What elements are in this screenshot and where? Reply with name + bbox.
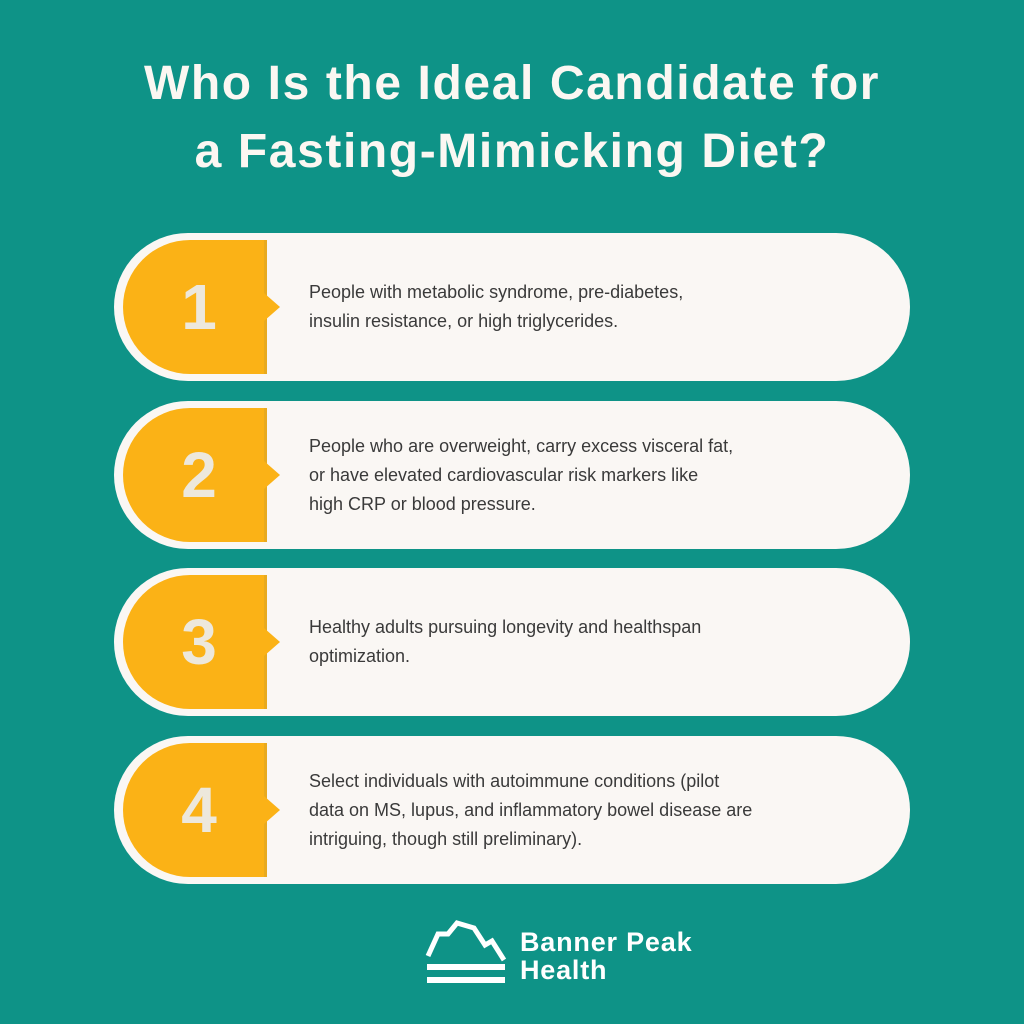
brand name — [520, 927, 692, 985]
card 2 — [114, 401, 910, 549]
text 3: Healthy adults pursuing longevity and healthspan — [309, 617, 701, 637]
text 4 — [309, 770, 752, 849]
text 2: or have elevated cardiovascular risk markers like — [309, 464, 698, 484]
card 3 — [114, 568, 910, 716]
arrow 1 — [264, 293, 280, 321]
text 1 — [309, 282, 683, 331]
title: a Fasting-Mimicking Diet? — [195, 125, 829, 178]
title: Who Is the Ideal Candidate for — [144, 57, 880, 110]
logo — [426, 920, 692, 985]
text 3: optimization. — [309, 646, 410, 666]
text 4: intriguing, though still preliminary). — [309, 828, 582, 848]
title — [144, 57, 880, 178]
badge 4: 4 — [181, 774, 217, 846]
text 2 — [309, 436, 733, 514]
badge 1: 1 — [181, 271, 217, 343]
brand name: Health — [520, 955, 607, 985]
text 1: insulin resistance, or high triglycerides. — [309, 311, 618, 331]
badge 2: 2 — [181, 439, 217, 511]
brand name: Banner Peak — [520, 927, 692, 957]
text 4: data on MS, lupus, and inflammatory bowel disease are — [309, 800, 752, 820]
badge 3: 3 — [181, 606, 217, 678]
text 3 — [309, 617, 701, 666]
text 2: high CRP or blood pressure. — [309, 494, 536, 514]
arrow 4 — [264, 796, 280, 824]
text 4: Select individuals with autoimmune conditions (pilot — [309, 770, 719, 790]
text 2: People who are overweight, carry excess visceral fat, — [309, 436, 733, 456]
badge 1 — [123, 240, 267, 374]
badge 3 — [123, 575, 267, 709]
badge 2 — [123, 408, 267, 542]
badge 4 — [123, 743, 267, 877]
card 4 — [114, 736, 910, 884]
arrow 2 — [264, 461, 280, 489]
arrow 3 — [264, 628, 280, 656]
card 1 — [114, 233, 910, 381]
text 1: People with metabolic syndrome, pre-diabetes, — [309, 282, 683, 302]
icon: mountain — [426, 920, 506, 983]
